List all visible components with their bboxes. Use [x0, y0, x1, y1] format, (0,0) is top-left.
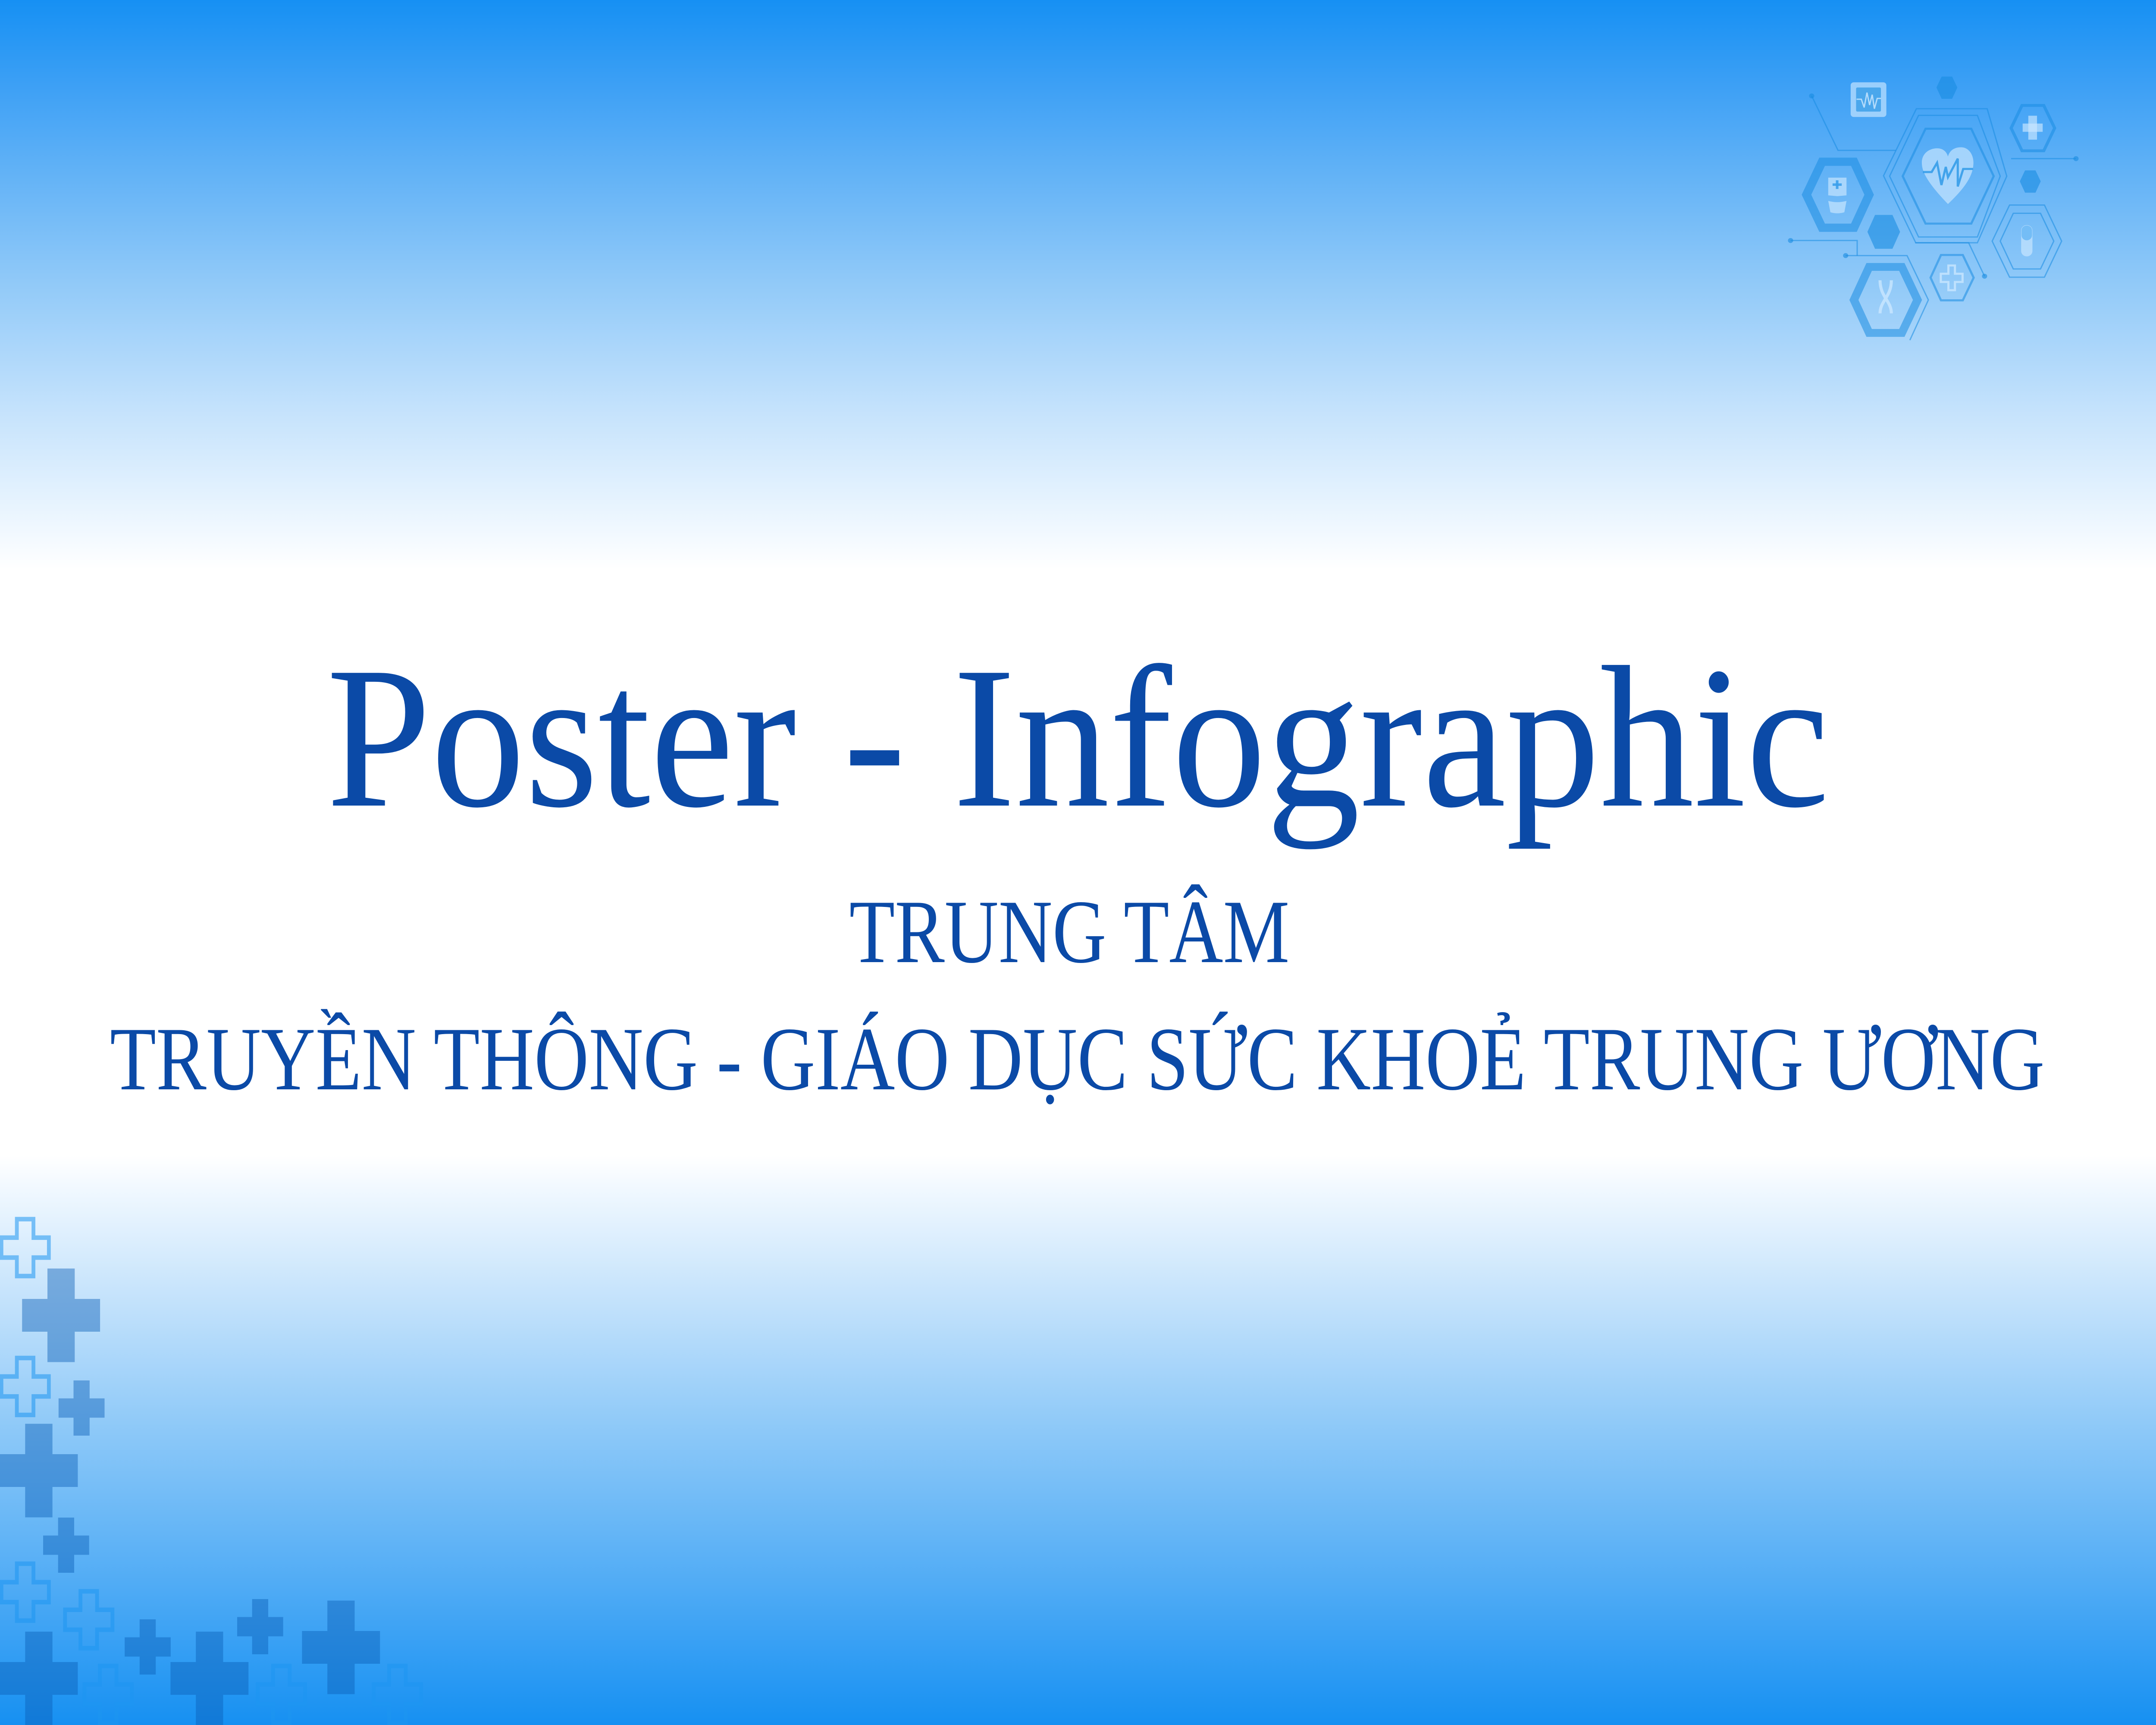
subtitle line 1: TRUNG TÂM: [849, 881, 1289, 982]
title: Poster - Infographic: [326, 625, 1830, 850]
subtitle line 2: TRUYỀN THÔNG - GIÁO DỤC SỨC KHOẺ TRUNG ƯƠNG: [110, 1009, 2045, 1109]
decoration: medical crosses bottom-left: [0, 1219, 421, 1725]
title block: [110, 625, 2045, 1109]
decoration: medical hexagon icons: [1788, 76, 2079, 340]
